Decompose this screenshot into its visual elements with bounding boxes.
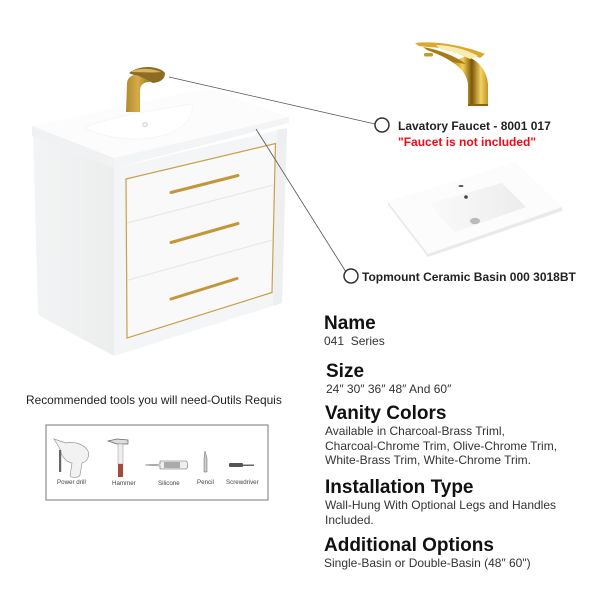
tools heading: Recommended tools you will need-Outils Requis: [26, 393, 282, 407]
spec: size: Size: [326, 361, 364, 382]
spec: name: [324, 313, 385, 348]
basin callout: [344, 269, 577, 284]
icon: hammer: Hammer: [112, 480, 136, 487]
spec: installation type: Included.: [325, 513, 374, 527]
spec: vanity colors: Vanity Colors: [325, 403, 446, 424]
faucet note: "Faucet is not included": [398, 135, 536, 149]
basin label: Topmount Ceramic Basin 000 3018BT: [362, 270, 577, 284]
spec: additional options: [324, 535, 531, 570]
basin top slab: [32, 88, 289, 168]
spec: vanity colors: [325, 403, 557, 467]
icon: silicone: Silicone: [158, 480, 180, 487]
faucet label: Lavatory Faucet - 8001 017: [398, 119, 551, 133]
spec: size: [326, 361, 452, 396]
drawer fronts: [127, 144, 275, 337]
faucet callout: [375, 118, 551, 149]
icon: power drill: [54, 439, 89, 486]
icon: power drill: Power drill: [57, 479, 86, 486]
icon: silicone: [145, 461, 188, 487]
icon: pencil: Pencil: [197, 479, 214, 486]
spec: additional options: Single-Basin or Double-Basin (48″ 60"): [324, 556, 531, 570]
spec: installation type: Installation Type: [325, 477, 474, 498]
spec: name: 041 Series: [324, 334, 385, 348]
gold trim frame: [126, 144, 276, 338]
spec: size: 24″ 30″ 36″ 48″ And 60″: [326, 382, 452, 396]
icon: screwdriver: Screwdriver: [226, 479, 259, 486]
marker circle: [344, 269, 358, 283]
marker circle: [375, 118, 389, 132]
spec: name: Name: [324, 313, 376, 334]
spec: installation type: Wall-Hung With Optional Legs and Handles: [325, 498, 556, 512]
faucet on vanity: [126, 67, 165, 112]
spec: vanity colors: White-Brass Trim, White-Chrome Trim.: [325, 453, 531, 467]
vanity side panel: [33, 136, 114, 356]
ceramic basin product image: [388, 163, 562, 257]
spec: additional options: Additional Options: [324, 535, 494, 556]
drawer handles: [171, 176, 238, 299]
leader line: faucet: [169, 77, 375, 124]
vanity illustration: [32, 67, 289, 356]
vanity front panel: [114, 128, 287, 356]
spec: installation type: [325, 477, 556, 527]
icon: hammer: [108, 439, 136, 487]
leader line: basin: [256, 129, 346, 272]
faucet product image: [415, 42, 488, 106]
spec: vanity colors: Charcoal-Chrome Trim, Olive-Chrome Trim,: [325, 439, 557, 453]
icon: pencil: [197, 451, 214, 486]
spec: vanity colors: Available in Charcoal-Brass Triml,: [325, 424, 505, 438]
icon: screwdriver: [226, 463, 259, 486]
tools panel: [46, 425, 268, 500]
